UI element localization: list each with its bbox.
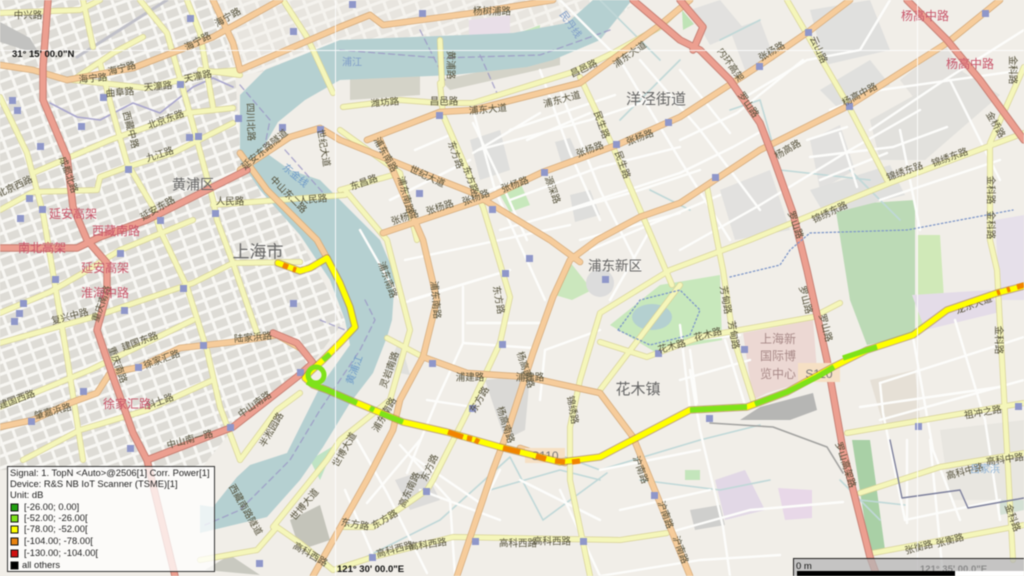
road labels: 九江路	[144, 144, 176, 165]
legend panel: Device: R&S NB IoT Scanner (TSME)[1]	[10, 478, 178, 489]
road labels: 海宁路	[107, 59, 138, 78]
red trunk road labels: 杨高中路	[946, 56, 994, 71]
road labels: 东方路	[369, 507, 401, 532]
red trunk road labels: 杨高中路	[901, 8, 949, 23]
road labels: 东方路	[340, 516, 371, 533]
road labels: 复兴中路	[50, 306, 90, 327]
road labels: 浦东南路	[375, 260, 400, 300]
road labels: 高科西路	[533, 536, 571, 548]
road labels: 海宁路	[182, 29, 214, 54]
road labels: 重庆南路	[105, 345, 130, 385]
road labels: 建国东路	[120, 329, 160, 354]
S110 shields: S110	[805, 367, 833, 381]
road labels: 张杨路	[424, 197, 456, 218]
road labels: 张杨路	[499, 174, 531, 195]
road labels: 罗山路	[735, 90, 762, 120]
road labels: 高科中路	[985, 451, 1024, 468]
road labels: 龙东大道	[954, 292, 994, 317]
road labels: 芳甸路	[717, 285, 734, 315]
legend entry: strongest: [-26.00; 0.00]	[24, 501, 79, 512]
S110 shields: S110	[531, 449, 559, 463]
railway	[710, 423, 843, 473]
road labels: 昌邑路	[430, 96, 459, 108]
road labels: 浦建路	[516, 372, 545, 384]
road labels: 罗山路	[816, 313, 835, 344]
road labels: 沪南路	[655, 499, 676, 531]
road labels: 海宁路	[212, 5, 244, 30]
red trunk road labels: 淮海中路	[81, 285, 129, 300]
legend entry: strong: [-52.00; -26.00[	[24, 512, 88, 523]
road labels: 西藏中路	[120, 110, 141, 150]
road labels: 高科中路	[945, 461, 985, 482]
road labels: 肇嘉浜路	[33, 401, 73, 422]
road labels: 人民路	[298, 192, 328, 207]
road labels: 张衡路	[904, 538, 935, 557]
S110 shields	[525, 363, 840, 463]
road labels: 张杨路	[756, 39, 788, 64]
road labels: 斜土路	[144, 391, 176, 412]
place names: 花木镇	[615, 381, 661, 398]
park dotted path and boundary	[618, 210, 1013, 345]
place names	[172, 8, 1000, 476]
road labels: 曲阜路	[105, 85, 135, 100]
road labels: 祖冲之路	[963, 403, 1003, 422]
road labels: 西藏南路隧道	[226, 482, 265, 538]
place names: 上海新	[760, 331, 796, 346]
road labels: 内环高架	[715, 46, 746, 84]
road labels: 北京东路	[146, 107, 186, 132]
road labels: 东方路	[467, 384, 492, 415]
scale bar: 0 m	[796, 561, 812, 572]
road labels: 延安东路	[138, 194, 178, 223]
road labels: 浦东南路	[428, 280, 443, 320]
road labels: 高科西路	[375, 539, 415, 560]
road labels: 金科路	[984, 176, 996, 205]
scale bar	[794, 558, 1024, 576]
road labels: 东方路	[445, 139, 466, 171]
Suzhou creek and canals	[50, 78, 233, 120]
coordinate labels: 31° 15' 00.0"N	[12, 49, 74, 60]
legend panel	[8, 466, 214, 572]
road labels: 高东南路	[396, 470, 423, 510]
route: orange segments	[283, 265, 1024, 462]
route: green segments	[307, 347, 877, 422]
road labels: 浦东南路	[395, 175, 416, 215]
road labels: 中山南一路	[165, 427, 215, 451]
road labels: 高科西路	[408, 536, 448, 553]
road labels: 杨树浦路	[473, 6, 511, 18]
road labels: 张杨路	[574, 139, 606, 160]
route: loop at junction	[308, 367, 324, 383]
road labels: 黄浦路	[444, 51, 456, 80]
red trunk road labels	[18, 8, 994, 411]
road labels: 海宁路	[78, 71, 108, 86]
road labels: 源深路	[542, 174, 563, 206]
road labels: 成都北路	[56, 155, 81, 195]
coordinate labels: 121° 30' 00.0"E	[337, 564, 404, 575]
road labels: 徐家汇路	[142, 347, 182, 372]
road labels: 罗山高架路	[832, 440, 859, 490]
place names: 吕家浜	[970, 463, 1000, 476]
road labels: 浦建路	[456, 372, 485, 384]
red trunk road labels: 延安高架	[81, 260, 129, 275]
road labels: 金科路	[1006, 56, 1018, 85]
place names: 浦江	[342, 56, 362, 69]
river: Huangpu	[200, 0, 632, 533]
route: yellow signal base	[278, 258, 1024, 462]
road labels: 半淞园路	[257, 410, 287, 449]
road labels: 金科路	[992, 326, 1004, 355]
red trunk road labels: 南北高架	[18, 240, 66, 255]
road labels: 民生路	[612, 149, 633, 181]
dense blocks top centre	[215, 0, 640, 75]
road labels: 世纪大道	[314, 128, 333, 168]
road labels: 重庆南路	[89, 283, 114, 324]
place names: 国际博	[760, 348, 796, 363]
road labels: 浦东南路	[371, 135, 400, 175]
road labels: 花木路	[657, 337, 688, 356]
road labels: 人民路	[216, 196, 245, 208]
place names: 上海市	[232, 242, 284, 261]
road labels: 云山路	[807, 34, 830, 66]
road labels: 昌邑路	[568, 57, 600, 80]
road labels: 金桥路	[983, 109, 1008, 141]
road labels: 浦东大道	[611, 39, 649, 70]
road labels: 陆家浜路	[233, 330, 273, 345]
road labels: 杨高南路	[494, 405, 517, 445]
road labels: 高科西路	[499, 538, 537, 550]
road labels: 浦东大道	[542, 89, 582, 110]
place names: 东金线	[280, 161, 311, 190]
red trunk road labels: 徐家汇路	[103, 396, 151, 411]
legend panel: Signal: 1. TopN <Auto>@2506[1] Corr. Power[1]	[10, 467, 210, 478]
road labels: 世纪大道	[407, 163, 447, 190]
minor roads	[345, 0, 1024, 576]
road labels: 沪南路	[670, 534, 691, 566]
ferry lines	[205, 30, 610, 525]
road labels: 浦东大道	[468, 102, 508, 117]
road labels: 东昌路	[348, 172, 380, 193]
road labels: 张杨路	[460, 187, 492, 208]
road labels: 杨高路	[772, 137, 804, 162]
road labels: 浦东南路	[370, 395, 400, 434]
road labels: 中山东二路	[267, 174, 310, 216]
road labels: 天潼路	[183, 68, 214, 85]
legend entry: weak: [-104.00; -78.00[	[24, 535, 93, 546]
road labels: 花木路	[693, 325, 724, 344]
place names: 浦东新区	[588, 259, 642, 274]
measurement route	[278, 258, 1024, 462]
road labels: 张杨路	[389, 207, 421, 228]
road labels: 高科西路	[291, 540, 330, 570]
place names: 民丹线	[557, 8, 585, 41]
red trunk road labels: 西藏南路	[92, 223, 140, 238]
coordinate labels	[12, 49, 404, 575]
route casing	[278, 258, 1024, 462]
road labels: 天潼路	[143, 79, 173, 94]
road labels: 金科路	[984, 211, 996, 240]
place names: 览中心	[760, 366, 796, 381]
road labels: 世博大道	[288, 486, 322, 523]
road labels: 东方路	[490, 285, 507, 315]
legend entry: very weak: [-130.00; -104.00[	[24, 547, 98, 558]
road labels: 世博大道	[330, 430, 360, 469]
road labels: 锦绣路	[564, 395, 581, 425]
road labels: 民生路	[591, 109, 612, 141]
road labels: 中兴路	[14, 10, 43, 22]
legend panel: Unit: dB	[10, 489, 43, 500]
red trunk road labels: 延安高架	[49, 206, 97, 221]
road labels: 金科路	[1002, 502, 1023, 534]
road labels: 沪南路	[630, 454, 651, 486]
road labels: 锦绣东路	[885, 159, 925, 184]
legend entry: all others: all others	[22, 559, 60, 570]
road labels: 张杨路	[624, 127, 656, 148]
place names: 洋泾街道	[626, 91, 686, 108]
road labels: 杨高南路	[514, 350, 537, 390]
road labels: 锦绣东路	[930, 145, 970, 170]
place names: 黄浦江	[343, 353, 365, 386]
road labels: 张衡路	[935, 531, 966, 550]
road labels: 东方路	[460, 164, 481, 196]
road labels: 延安东路隧道	[239, 126, 291, 173]
road labels: 灵岩南路	[377, 349, 402, 390]
metro line south east	[890, 440, 1024, 508]
road labels: 中山南路	[236, 389, 274, 420]
road labels: 罗山路	[785, 209, 806, 241]
scale bar: 121° 35' 00.0"E	[920, 564, 987, 575]
road labels: 杨高中路	[840, 80, 880, 109]
dense urban blocks west of the river	[0, 0, 345, 470]
road labels: 罗山路	[796, 285, 815, 316]
road labels: 锦绣东路	[810, 199, 850, 226]
road labels: 东方路	[418, 452, 441, 483]
road labels: 潍坊路	[370, 95, 400, 110]
road labels: 芳甸路	[725, 320, 742, 350]
place names: 黄浦区	[172, 177, 214, 193]
road labels: 四川北路	[244, 103, 257, 142]
legend entry: medium: [-78.00; -52.00[	[24, 523, 88, 534]
